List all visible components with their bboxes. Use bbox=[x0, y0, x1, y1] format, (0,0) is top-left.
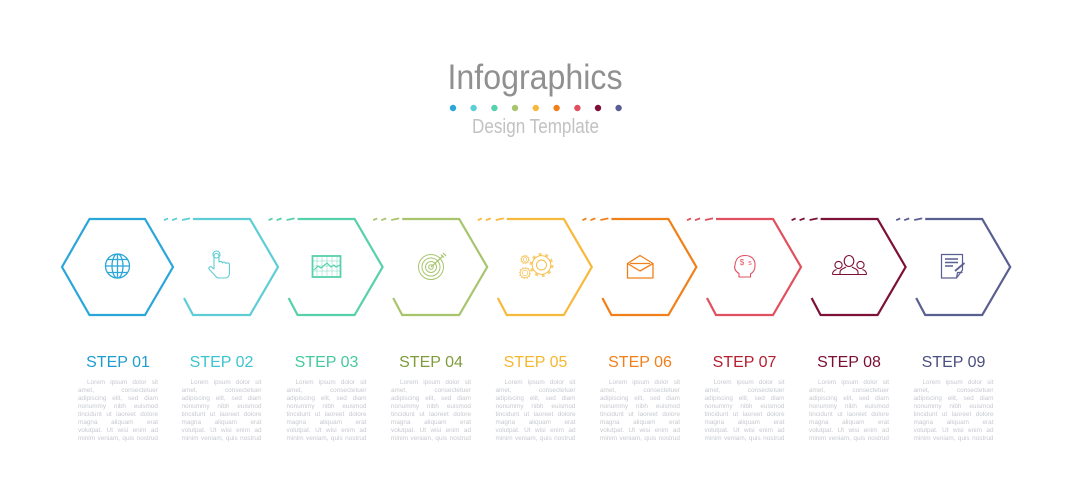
step 03 text: magna aliquam erat bbox=[286, 419, 366, 426]
step 04 text: minim veniam, quis nostrud bbox=[391, 435, 471, 442]
step 03 text bbox=[286, 354, 366, 442]
step 08 text: amet, consectetuer bbox=[809, 387, 889, 394]
step 09 text bbox=[914, 354, 994, 442]
step 07 text: amet, consectetuer bbox=[704, 387, 784, 394]
step 07 text: magna aliquam erat bbox=[704, 419, 784, 426]
step 02 text: amet, consectetuer bbox=[182, 387, 262, 394]
hexagon 3 bbox=[269, 218, 383, 315]
step 02 text bbox=[182, 354, 262, 442]
step 07 text: minim veniam, quis nostrud bbox=[704, 435, 784, 442]
step 02 text: adipiscing elit, sed diam bbox=[182, 395, 262, 402]
step 01 text: nonummy nibh euismod bbox=[78, 403, 158, 410]
icon: document with pen bbox=[942, 254, 964, 278]
row of coloured dots bbox=[450, 105, 622, 111]
step 06 text: volutpat. Ut wisi enim ad bbox=[600, 427, 680, 434]
step 01 text: Lorem ipsum dolor sit bbox=[87, 378, 158, 386]
step 05 text: magna aliquam erat bbox=[496, 419, 576, 426]
hexagon 5 bbox=[478, 218, 592, 315]
step 01 text: volutpat. Ut wisi enim ad bbox=[78, 427, 158, 434]
step 02 text: tincidunt ut laoreet dolore bbox=[182, 411, 262, 418]
step 05 text: STEP 05 bbox=[504, 354, 567, 371]
step 06 text: Lorem ipsum dolor sit bbox=[609, 378, 680, 386]
step 06 text: nonummy nibh euismod bbox=[600, 403, 680, 410]
step 04 text: nonummy nibh euismod bbox=[391, 403, 471, 410]
icon: pointing hand bbox=[209, 251, 230, 278]
step 06 text: minim veniam, quis nostrud bbox=[600, 435, 680, 442]
step 07 text: nonummy nibh euismod bbox=[704, 403, 784, 410]
step 04 text: magna aliquam erat bbox=[391, 419, 471, 426]
hexagon 7 bbox=[687, 218, 801, 315]
step 08 text: magna aliquam erat bbox=[809, 419, 889, 426]
step 06 text: tincidunt ut laoreet dolore bbox=[600, 411, 680, 418]
step 05 text: adipiscing elit, sed diam bbox=[496, 395, 576, 402]
step 04 text: volutpat. Ut wisi enim ad bbox=[391, 427, 471, 434]
step 07 text: Lorem ipsum dolor sit bbox=[714, 378, 784, 386]
step 07 text: adipiscing elit, sed diam bbox=[704, 395, 784, 402]
step 09 text: minim veniam, quis nostrud bbox=[914, 435, 994, 442]
step 08 text: Lorem ipsum dolor sit bbox=[818, 378, 889, 386]
step 01 text: adipiscing elit, sed diam bbox=[78, 395, 158, 402]
icon: globe bbox=[106, 254, 130, 278]
step 09 text: volutpat. Ut wisi enim ad bbox=[914, 427, 994, 434]
step 06 text bbox=[600, 354, 680, 442]
step 03 text: adipiscing elit, sed diam bbox=[286, 395, 366, 402]
step 06 text: STEP 06 bbox=[608, 354, 672, 371]
step 01 text: tincidunt ut laoreet dolore bbox=[78, 411, 158, 418]
step 07 text: volutpat. Ut wisi enim ad bbox=[704, 427, 784, 434]
icon: line chart bbox=[312, 256, 340, 277]
step 03 text: tincidunt ut laoreet dolore bbox=[286, 411, 366, 418]
step 04 text bbox=[391, 354, 471, 442]
subtitle: Design Template bbox=[472, 116, 599, 138]
step 05 text: Lorem ipsum dolor sit bbox=[504, 378, 576, 386]
step 01 text bbox=[78, 354, 158, 442]
hexagon 4 bbox=[373, 218, 487, 315]
icon: open envelope bbox=[628, 256, 653, 278]
step 03 text: amet, consectetuer bbox=[286, 387, 366, 394]
step 08 text: nonummy nibh euismod bbox=[809, 403, 889, 410]
step 04 text: amet, consectetuer bbox=[391, 387, 471, 394]
step 09 text: amet, consectetuer bbox=[914, 387, 994, 394]
step 01 text: amet, consectetuer bbox=[78, 387, 158, 394]
icon: head with dollar signs: s bbox=[748, 260, 752, 267]
step 09 text: Lorem ipsum dolor sit bbox=[922, 378, 994, 386]
step 05 text: amet, consectetuer bbox=[496, 387, 576, 394]
step 05 text: minim veniam, quis nostrud bbox=[496, 435, 576, 442]
step 03 text: volutpat. Ut wisi enim ad bbox=[286, 427, 366, 434]
hexagon 9 bbox=[896, 218, 1010, 315]
step 03 text: Lorem ipsum dolor sit bbox=[296, 378, 366, 386]
step 01 text: magna aliquam erat bbox=[78, 419, 158, 426]
step 04 text: Lorem ipsum dolor sit bbox=[400, 378, 471, 386]
step 03 text: nonummy nibh euismod bbox=[286, 403, 366, 410]
step 01 text: minim veniam, quis nostrud bbox=[78, 435, 158, 442]
step 07 text bbox=[704, 354, 784, 442]
step 09 text: magna aliquam erat bbox=[914, 419, 994, 426]
step 02 text: nonummy nibh euismod bbox=[182, 403, 262, 410]
step 09 text: STEP 09 bbox=[922, 354, 985, 371]
icon: group of people bbox=[832, 256, 866, 274]
step 03 text: STEP 03 bbox=[295, 354, 358, 371]
step 02 text: magna aliquam erat bbox=[182, 419, 262, 426]
step 08 text: minim veniam, quis nostrud bbox=[809, 435, 889, 442]
step 05 text: volutpat. Ut wisi enim ad bbox=[496, 427, 576, 434]
step 02 text: STEP 02 bbox=[190, 354, 253, 371]
step 08 text: adipiscing elit, sed diam bbox=[809, 395, 889, 402]
hexagon 2 bbox=[164, 218, 278, 315]
step 06 text: adipiscing elit, sed diam bbox=[600, 395, 680, 402]
step 08 text: tincidunt ut laoreet dolore bbox=[809, 411, 889, 418]
step 09 text: tincidunt ut laoreet dolore bbox=[914, 411, 994, 418]
step 01 text: STEP 01 bbox=[86, 354, 150, 371]
hexagon 6 bbox=[582, 218, 696, 315]
step 08 text: STEP 08 bbox=[817, 354, 881, 371]
step 02 text: volutpat. Ut wisi enim ad bbox=[182, 427, 262, 434]
step 04 text: STEP 04 bbox=[399, 354, 463, 371]
step 06 text: magna aliquam erat bbox=[600, 419, 680, 426]
icon: head with dollar signs bbox=[735, 256, 755, 277]
step 09 text: nonummy nibh euismod bbox=[914, 403, 994, 410]
step 04 text: tincidunt ut laoreet dolore bbox=[391, 411, 471, 418]
step 08 text bbox=[809, 354, 889, 442]
icon: gears bbox=[519, 254, 552, 279]
step 07 text: tincidunt ut laoreet dolore bbox=[704, 411, 784, 418]
icon: head with dollar signs: $ bbox=[740, 258, 745, 267]
step 02 text: Lorem ipsum dolor sit bbox=[190, 378, 262, 386]
step 05 text: nonummy nibh euismod bbox=[496, 403, 576, 410]
step 09 text: adipiscing elit, sed diam bbox=[914, 395, 994, 402]
hexagon 8 bbox=[792, 218, 906, 315]
step 08 text: volutpat. Ut wisi enim ad bbox=[809, 427, 889, 434]
icon: target with arrow bbox=[418, 253, 446, 280]
step 05 text bbox=[496, 354, 576, 442]
hexagon 1 bbox=[62, 219, 173, 315]
step 03 text: minim veniam, quis nostrud bbox=[286, 435, 366, 442]
step 07 text: STEP 07 bbox=[713, 354, 776, 371]
title: Infographics bbox=[448, 58, 622, 97]
step 02 text: minim veniam, quis nostrud bbox=[182, 435, 262, 442]
step 04 text: adipiscing elit, sed diam bbox=[391, 395, 471, 402]
step 06 text: amet, consectetuer bbox=[600, 387, 680, 394]
step 05 text: tincidunt ut laoreet dolore bbox=[496, 411, 576, 418]
